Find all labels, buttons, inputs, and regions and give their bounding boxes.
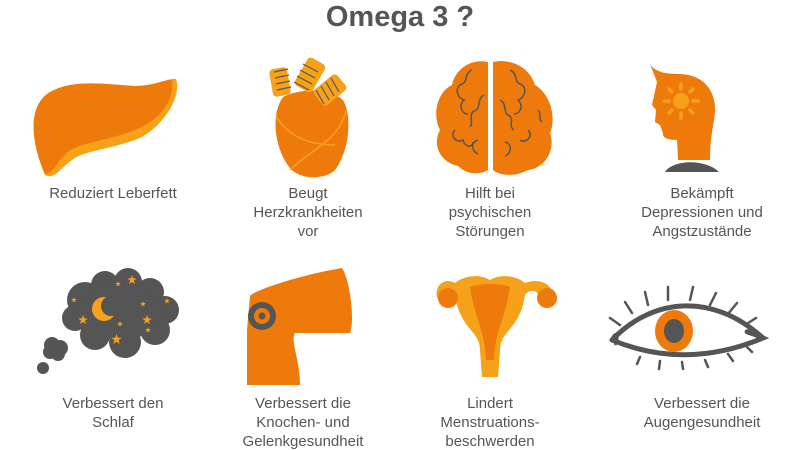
label: knee: Verbessert die	[255, 395, 351, 412]
icon: head with sun	[650, 64, 719, 172]
icon: eye	[610, 287, 763, 369]
label: heart: vor	[298, 223, 318, 240]
icon: liver	[34, 79, 177, 176]
title: Omega 3 ?	[326, 1, 474, 33]
label: sleep: Verbessert den	[63, 395, 163, 412]
icon: knee	[247, 268, 352, 385]
label: heart: Herzkrankheiten	[253, 204, 363, 221]
label: liver: Reduziert Leberfett	[49, 185, 178, 202]
label: brain: Störungen	[455, 223, 525, 240]
icon: sleep cloud	[37, 268, 179, 374]
label: head: Depressionen und	[641, 204, 763, 221]
label: head: Angstzustände	[652, 223, 752, 240]
label: uterus: Lindert	[467, 395, 514, 412]
label: knee: Knochen- und	[256, 414, 350, 431]
label: brain: psychischen	[449, 204, 531, 221]
label: uterus: beschwerden	[445, 433, 535, 450]
label: brain: Hilft bei	[465, 185, 515, 202]
label: eye: Verbessert die	[654, 395, 750, 412]
label: eye: Augengesundheit	[644, 414, 761, 431]
icon: brain	[436, 61, 553, 175]
icon: moon	[92, 296, 121, 321]
icon: heart	[269, 56, 348, 177]
label: head: Bekämpft	[670, 185, 735, 202]
icon: uterus	[436, 276, 557, 377]
label: heart: Beugt	[288, 185, 328, 202]
label: knee: Gelenkgesundheit	[243, 433, 364, 450]
label: sleep: Schlaf	[92, 414, 135, 431]
label: uterus: Menstruations-	[440, 414, 540, 431]
